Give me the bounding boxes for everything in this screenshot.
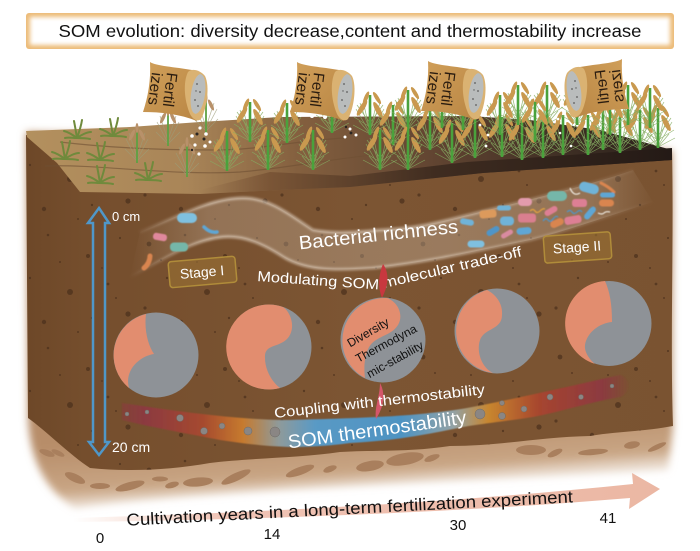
pie stage 4 <box>454 288 540 374</box>
depth double arrow <box>88 208 109 455</box>
timeline tick 14: 14 <box>264 526 280 543</box>
timeline tick 0: 0 <box>96 530 104 547</box>
pie stage 1 <box>114 312 198 398</box>
pie stage 5 <box>565 281 652 366</box>
fertilizer grains <box>190 113 572 156</box>
stage II label: Stage II <box>552 237 602 257</box>
red connector arrow upper <box>379 264 387 298</box>
pie stage 3 with labels: Thermodyna <box>353 321 419 365</box>
title text: SOM evolution: diversity decrease,content and thermostability increase <box>58 21 642 41</box>
fertilizer bag 2: Fertil <box>306 72 327 108</box>
timeline label: Cultivation years in a long-term fertilization experiment <box>126 487 574 530</box>
fertilizer bag 2: izers <box>291 72 312 106</box>
20 cm label: 20 cm <box>112 439 150 455</box>
ground surface <box>26 116 672 194</box>
fertilizer bag 4: izers <box>607 69 628 103</box>
title banner <box>26 13 674 49</box>
SOM thermostability band <box>122 375 628 447</box>
fertilizer bag 4 <box>564 59 629 118</box>
fertilizer bag 4: Fertil <box>592 69 613 105</box>
seedlings and rice plants <box>52 81 675 184</box>
fertilizer bag 3: izers <box>422 71 443 105</box>
soil cross-section block <box>26 132 673 508</box>
fertilizer bag 3 <box>421 61 486 120</box>
modulating SOM molecular trade-off label: Modulating SOM <box>257 269 380 294</box>
fertilizer bag 1 <box>143 62 208 121</box>
pie stage 2 <box>226 304 312 390</box>
cultivation timeline arrow <box>73 473 660 522</box>
stage I label: Stage I <box>179 262 225 282</box>
pie stage 3 with labels <box>340 298 426 382</box>
bacterial richness label: Bacterial richness <box>298 217 459 254</box>
bacterial richness band <box>130 170 653 277</box>
fertilizer bag 3: Fertil <box>437 71 458 107</box>
pie stage 3 with labels: Diversity <box>345 315 391 350</box>
modulating SOM molecular trade-off label <box>257 244 524 294</box>
fertilizer bag 2 <box>290 62 355 121</box>
stage I label <box>168 256 237 288</box>
red connector arrow lower <box>376 383 383 419</box>
0 cm label: 0 cm <box>112 209 140 224</box>
rocks in thermostability band <box>125 384 614 437</box>
tan sub-soil stones <box>38 440 667 494</box>
timeline tick 41: 41 <box>600 510 616 527</box>
bacteria <box>144 181 615 268</box>
fertilizer bag 1: Fertil <box>159 72 180 108</box>
stage II label <box>543 232 612 263</box>
coupling with thermostability label: Coupling with thermostability <box>273 382 487 422</box>
timeline tick 30: 30 <box>450 517 466 534</box>
modulating SOM molecular trade-off label: molecular trade-off <box>381 244 524 292</box>
pie stage 3 with labels: mic-stability <box>364 338 426 381</box>
SOM thermostability label: SOM thermostability <box>287 408 468 453</box>
fertilizer bag 1: izers <box>144 72 165 106</box>
